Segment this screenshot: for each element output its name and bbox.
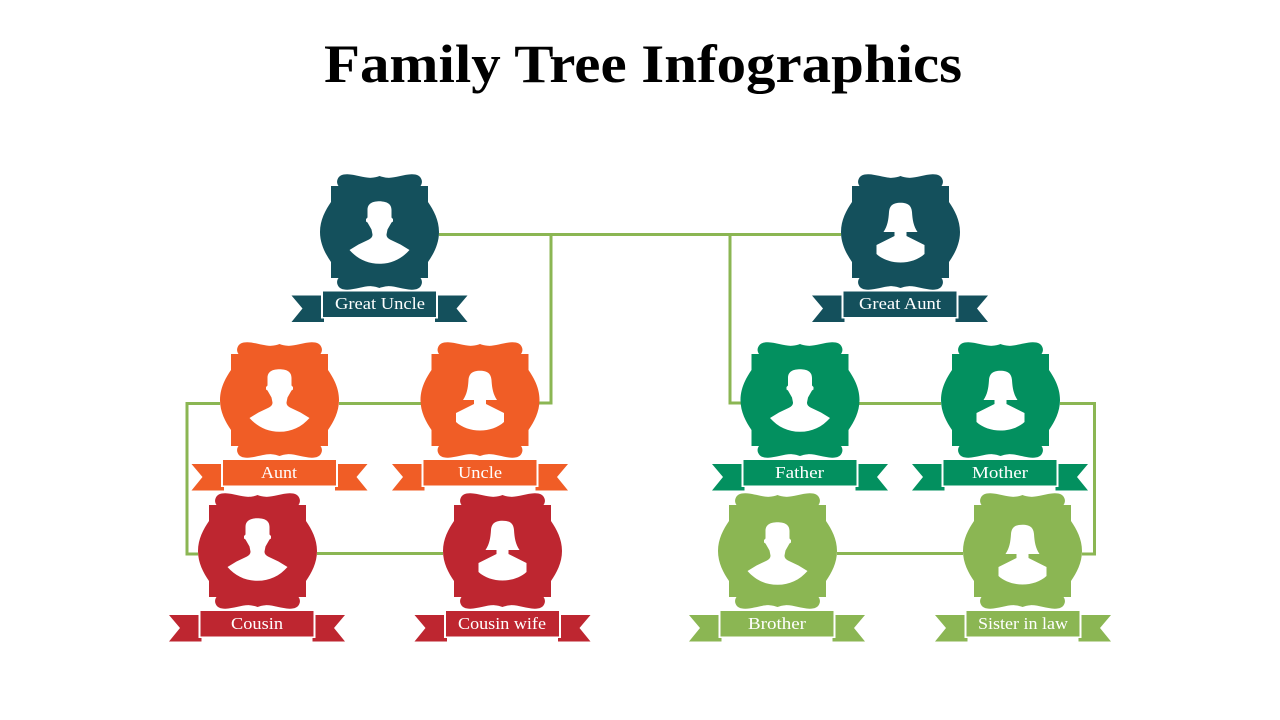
icon: female silhouette — [876, 203, 924, 262]
icon: male silhouette — [350, 201, 410, 264]
icon: male silhouette — [250, 369, 310, 432]
icon: male silhouette — [748, 522, 808, 585]
ribbon — [392, 460, 568, 490]
icon: female silhouette — [998, 525, 1046, 584]
ribbon — [689, 611, 865, 642]
ribbon — [712, 460, 888, 490]
label: Cousin — [231, 614, 284, 633]
icon: female silhouette — [976, 371, 1024, 430]
ribbon — [414, 611, 590, 642]
badge — [718, 493, 837, 609]
badge — [420, 342, 540, 458]
panel: Cousin — [169, 493, 345, 642]
connector lines — [187, 234, 1094, 554]
panel: Sister in law — [935, 493, 1111, 642]
ribbon — [812, 292, 988, 322]
title: Family Tree Infographics — [324, 34, 962, 94]
panel: Brother — [689, 493, 865, 642]
ribbon — [912, 460, 1088, 490]
badge — [443, 493, 562, 609]
panel: Father — [712, 342, 888, 490]
ribbon — [935, 611, 1111, 642]
icon: male silhouette — [770, 369, 830, 432]
label: Cousin wife — [458, 614, 546, 633]
panel: Cousin wife — [414, 493, 590, 642]
label: Mother — [972, 463, 1028, 482]
panel: Great Uncle — [292, 174, 468, 322]
badge — [320, 174, 439, 290]
badge — [198, 493, 317, 609]
ribbon — [192, 460, 368, 490]
icon: male silhouette — [228, 518, 288, 581]
ribbon — [292, 292, 468, 322]
label: Great Uncle — [335, 294, 425, 313]
badge — [841, 174, 960, 290]
panel: Mother — [912, 342, 1088, 490]
label: Uncle — [458, 463, 502, 482]
icon: female silhouette — [478, 521, 526, 580]
label: Great Aunt — [859, 294, 941, 313]
panel: Great Aunt — [812, 174, 988, 322]
badge — [740, 342, 860, 458]
badge — [963, 493, 1082, 609]
icon: female silhouette — [456, 371, 504, 430]
badge — [941, 342, 1060, 458]
badge — [220, 342, 339, 458]
ribbon — [169, 611, 345, 642]
label: Brother — [748, 614, 806, 633]
panel: Uncle — [392, 342, 568, 490]
label: Father — [775, 463, 824, 482]
panel: Aunt — [192, 342, 368, 490]
label: Aunt — [261, 463, 297, 482]
label: Sister in law — [978, 614, 1069, 633]
